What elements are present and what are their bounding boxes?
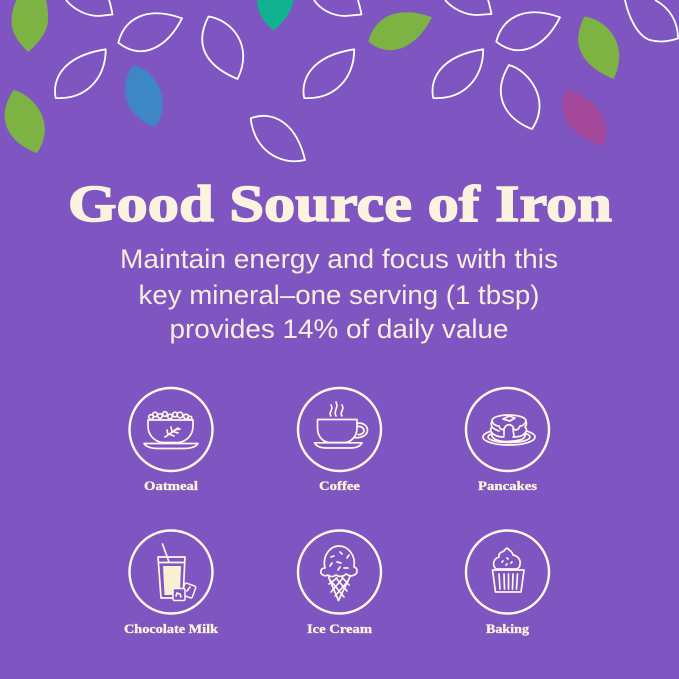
item: pancakes bbox=[466, 388, 549, 493]
leaf: outline top partial 1 bbox=[66, 0, 112, 16]
item: baking bbox=[466, 530, 549, 636]
leaf: outline top partial 2 bbox=[314, 0, 362, 16]
item: coffee bbox=[298, 388, 381, 493]
icon: oatmeal bowl bbox=[130, 388, 212, 471]
leaf: blue bbox=[125, 65, 163, 127]
leaf: green top left bbox=[12, 0, 48, 52]
leaf: teal bbox=[257, 0, 294, 30]
item: chocolate milk bbox=[124, 530, 219, 636]
icon: pancake stack bbox=[466, 388, 549, 471]
decorative leaves bbox=[5, 0, 678, 161]
description text: provides 14% of daily value bbox=[170, 314, 509, 344]
leaf: outline top partial 3 bbox=[445, 0, 492, 15]
description text bbox=[120, 244, 558, 344]
leaf: outline bottom bbox=[251, 116, 305, 161]
label: oatmeal: Oatmeal bbox=[144, 478, 198, 493]
leaf: outline 4 bbox=[55, 49, 106, 98]
label: ice cream: Ice Cream bbox=[307, 621, 372, 636]
leaf: outline 7 bbox=[432, 49, 483, 98]
description text: Maintain energy and focus with this bbox=[120, 244, 558, 274]
leaf: outline 2 bbox=[118, 13, 182, 51]
leaf: green right bbox=[578, 16, 619, 79]
label: pancakes: Pancakes bbox=[478, 478, 537, 493]
leaf: outline 6 bbox=[496, 12, 560, 50]
icon: ice cream cone bbox=[298, 530, 381, 614]
label: chocolate milk: Chocolate Milk bbox=[124, 621, 219, 636]
item: oatmeal bbox=[130, 388, 212, 493]
leaf: outline top right bbox=[625, 0, 678, 42]
leaf: outline 3 bbox=[202, 16, 243, 79]
icon: coffee cup bbox=[298, 388, 381, 471]
title: Good Source of Iron bbox=[68, 176, 612, 233]
leaf: green centre bbox=[368, 12, 432, 50]
icon: glass with ice cubes bbox=[130, 530, 212, 614]
item: ice cream bbox=[298, 530, 381, 636]
leaf: green left bbox=[5, 90, 45, 153]
icon: cupcake bbox=[466, 530, 549, 614]
leaf: outline 8 bbox=[501, 65, 540, 129]
label: baking: Baking bbox=[486, 621, 530, 636]
label: coffee: Coffee bbox=[319, 478, 360, 493]
leaf: magenta bbox=[563, 90, 606, 146]
description text: key mineral–one serving (1 tbsp) bbox=[138, 280, 540, 310]
leaf: outline 5 bbox=[303, 49, 354, 98]
